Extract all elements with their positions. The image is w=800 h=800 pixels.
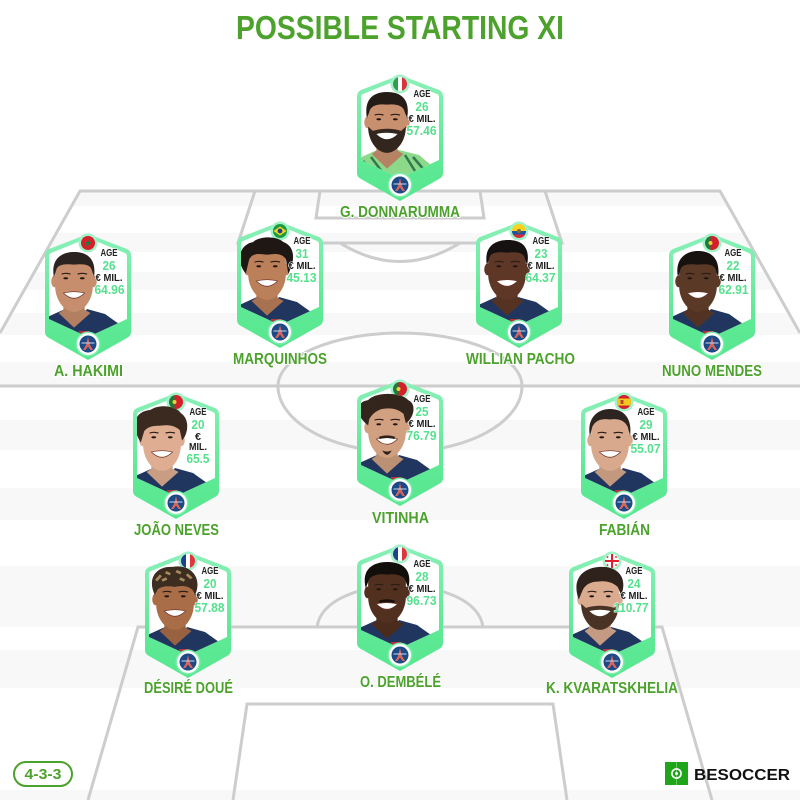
player photo	[361, 394, 430, 480]
stats: 28	[416, 569, 428, 584]
stats: € MIL.	[720, 272, 747, 284]
name: A. Hakimi: A. HAKIMI	[54, 363, 123, 380]
stats	[406, 558, 436, 608]
name: Désiré Doué: DÉSIRÉ DOUÉ	[144, 678, 233, 697]
logo: BeSoccer: BESOCCER	[694, 767, 790, 784]
player photo	[361, 92, 430, 175]
name: Vitinha: VITINHA	[372, 510, 429, 527]
stats: 57.88	[194, 600, 224, 615]
player card: Fabián	[581, 392, 667, 519]
stats: AGE	[414, 88, 430, 100]
stats: € MIL.	[408, 418, 436, 430]
club crest	[176, 650, 200, 674]
player photo	[241, 237, 310, 322]
formation badge: 4-3-3	[24, 766, 62, 783]
player card: Nuno Mendes	[669, 234, 755, 360]
player photo	[573, 566, 642, 652]
stats: 22	[726, 258, 740, 273]
player photo	[361, 562, 430, 645]
stats: 24	[628, 576, 641, 591]
player card: Vitinha	[357, 380, 443, 506]
stats: MIL.	[189, 441, 207, 453]
formation badge	[14, 762, 72, 786]
stats: 110.77	[614, 600, 648, 615]
background: pitch stripes	[0, 191, 800, 800]
stats: € MIL.	[196, 590, 224, 602]
stats: 20	[204, 576, 216, 591]
stats: AGE	[532, 235, 550, 247]
stats: AGE	[414, 393, 430, 405]
stats: 64.37	[526, 270, 556, 285]
stats: 64.96	[94, 282, 124, 297]
flag: Morocco	[81, 236, 95, 250]
stats: AGE	[202, 565, 218, 577]
stats: 96.73	[406, 593, 436, 608]
stats: AGE	[626, 565, 642, 577]
player card: Marquinhos	[237, 222, 323, 348]
stats: AGE	[724, 247, 742, 259]
club crest	[164, 490, 188, 516]
name: Fabián: FABIÁN	[599, 520, 650, 539]
name: G. Donnarumma: G. DONNARUMMA	[340, 204, 460, 221]
stats: 23	[534, 246, 548, 261]
club crest	[76, 332, 100, 356]
player photo	[585, 409, 654, 493]
player photo	[49, 252, 118, 334]
club crest	[268, 320, 292, 344]
stats	[718, 247, 748, 297]
player card: G. Donnarumma	[357, 74, 443, 201]
player photo	[137, 406, 206, 493]
stats: 57.46	[406, 123, 436, 138]
player card: Willian Pacho	[476, 222, 562, 348]
stats: 65.5	[186, 451, 210, 466]
player card: João Neves	[133, 392, 219, 519]
flag: Portugal	[393, 382, 407, 396]
flag: Italy	[393, 77, 407, 91]
club crest	[612, 490, 636, 516]
club crest	[388, 642, 412, 668]
stats: 76.79	[406, 428, 436, 443]
stats: 55.07	[630, 441, 660, 456]
name: João Neves: JOÃO NEVES	[134, 519, 219, 539]
club crest	[506, 320, 532, 344]
player card: K. Kvaratskhelia	[569, 552, 655, 678]
icon: pitch square	[665, 762, 688, 785]
flag: Spain	[617, 395, 631, 409]
name: O. Dembélé: O. DEMBÉLÉ	[360, 672, 441, 691]
title: POSSIBLE STARTING XI	[236, 9, 564, 46]
stats	[286, 235, 316, 285]
stats: 29	[640, 417, 652, 432]
flag: France	[181, 554, 195, 568]
stats: AGE	[294, 235, 310, 247]
name: Marquinhos: MARQUINHOS	[233, 351, 327, 368]
flag: France	[393, 547, 407, 561]
flag: Georgia	[605, 554, 619, 568]
stats: 26	[416, 99, 428, 114]
flag: Portugal	[705, 236, 719, 250]
club crest	[388, 172, 412, 198]
stats	[94, 247, 124, 297]
stats: 31	[296, 246, 308, 261]
stats	[526, 235, 556, 285]
club crest	[388, 478, 412, 502]
stats: € MIL.	[408, 583, 436, 595]
club crest	[700, 332, 724, 356]
club crest	[600, 650, 624, 674]
pitch lines	[0, 191, 800, 800]
stats	[186, 406, 210, 466]
stats: 62.91	[718, 282, 748, 297]
stats: € MIL.	[620, 590, 648, 602]
stats	[614, 565, 648, 615]
name: Willian Pacho: WILLIAN PACHO	[466, 351, 575, 368]
flag: Brazil	[273, 224, 287, 238]
stats: AGE	[190, 406, 206, 418]
stats: € MIL.	[632, 431, 660, 443]
stats: AGE	[100, 247, 118, 259]
stats	[406, 393, 436, 443]
stats	[194, 565, 224, 615]
player photo	[480, 240, 549, 322]
stats: AGE	[414, 558, 430, 570]
flag: Portugal	[169, 395, 183, 409]
stats: €	[195, 431, 201, 443]
name: Nuno Mendes: NUNO MENDES	[662, 363, 762, 380]
player card: O. Dembélé	[357, 544, 443, 671]
player card: Désiré Doué	[145, 552, 231, 678]
player photo	[673, 251, 742, 334]
logo: BeSoccer	[665, 762, 790, 785]
stats: 20	[192, 417, 204, 432]
stats	[406, 88, 436, 138]
player card: A. Hakimi	[45, 234, 131, 360]
name: K. Kvaratskhelia: K. KVARATSKHELIA	[546, 680, 678, 697]
stats: € MIL.	[288, 260, 316, 272]
flag: Ecuador	[512, 224, 526, 238]
stats: € MIL.	[96, 272, 123, 284]
stats: 25	[416, 404, 428, 419]
stats: € MIL.	[408, 113, 436, 125]
stats: 45.13	[286, 270, 316, 285]
stats: € MIL.	[528, 260, 555, 272]
stats: AGE	[638, 406, 654, 418]
player photo	[149, 566, 218, 652]
stats: 26	[102, 258, 116, 273]
stats	[630, 406, 660, 456]
